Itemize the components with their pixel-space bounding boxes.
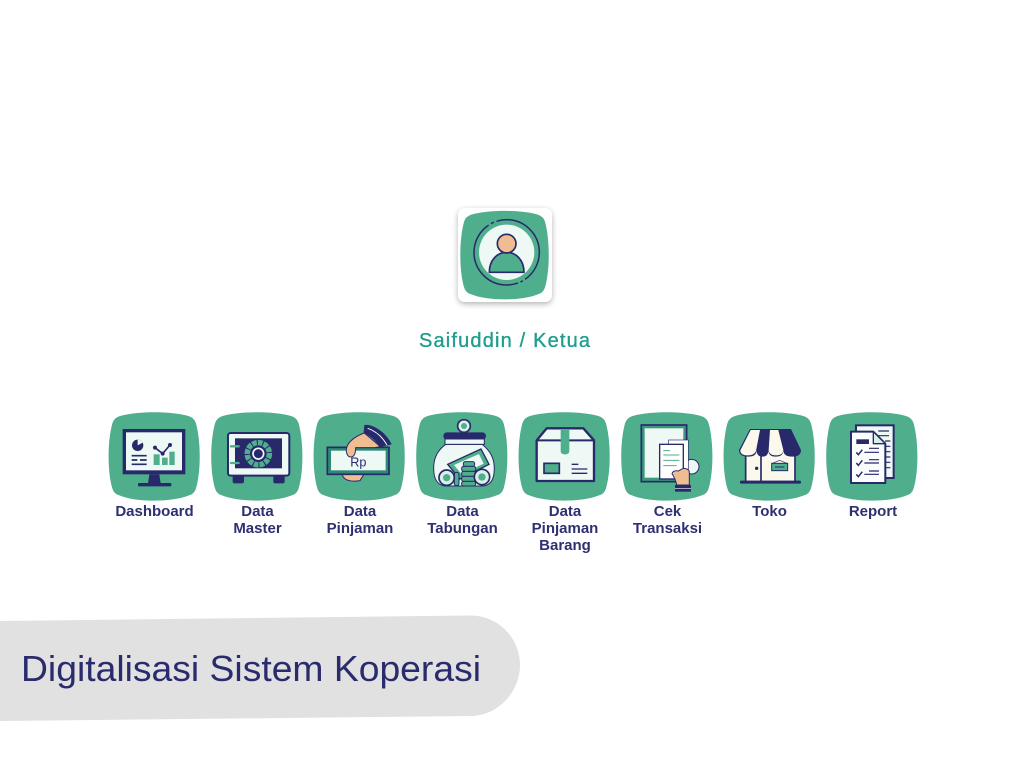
menu item: Toko [724, 412, 815, 520]
menu item: Dashboard [109, 412, 200, 520]
menu item: Data Tabungan: Tabungan [427, 520, 498, 537]
icon: savings jar [416, 412, 507, 501]
menu item: Report [826, 412, 917, 520]
label: Data [241, 503, 274, 520]
icon: safe [211, 412, 302, 501]
menu item: Data Pinjaman: Pinjaman [327, 520, 393, 537]
menu item: Data Pinjaman [314, 412, 405, 537]
label: Toko [752, 503, 787, 520]
label: Dashboard [115, 503, 194, 520]
menu item: Data Master: Master [233, 520, 282, 537]
menu item: Data Tabungan [416, 412, 507, 537]
profile block [419, 208, 591, 352]
menu item: Data Pinjaman Barang [519, 412, 610, 554]
menu item: Cek Transaksi: Transaksi [633, 520, 702, 537]
icon: dashboard monitor [109, 412, 200, 501]
label: Cek [654, 503, 682, 520]
menu item: Data Pinjaman Barang: Pinjaman [532, 520, 598, 537]
label: Data [549, 503, 582, 520]
icon: hand holding banknote: Rp [350, 455, 366, 469]
avatar icon [460, 211, 549, 299]
title: Digitalisasi Sistem Koperasi [21, 648, 481, 689]
icon: document check [621, 412, 712, 501]
menu item: Cek Transaksi [621, 412, 712, 537]
label: Data [344, 503, 377, 520]
icon: report documents [826, 412, 917, 501]
title banner [0, 615, 520, 721]
user name: Saifuddin / Ketua [419, 330, 591, 352]
label: Data [446, 503, 479, 520]
menu item: Data Master [211, 412, 302, 537]
menu item: Data Pinjaman Barang: Barang [539, 537, 591, 554]
icon: parcel box [519, 412, 610, 501]
icon: storefront [724, 412, 815, 501]
avatar card [458, 208, 552, 302]
label: Report [849, 503, 897, 520]
